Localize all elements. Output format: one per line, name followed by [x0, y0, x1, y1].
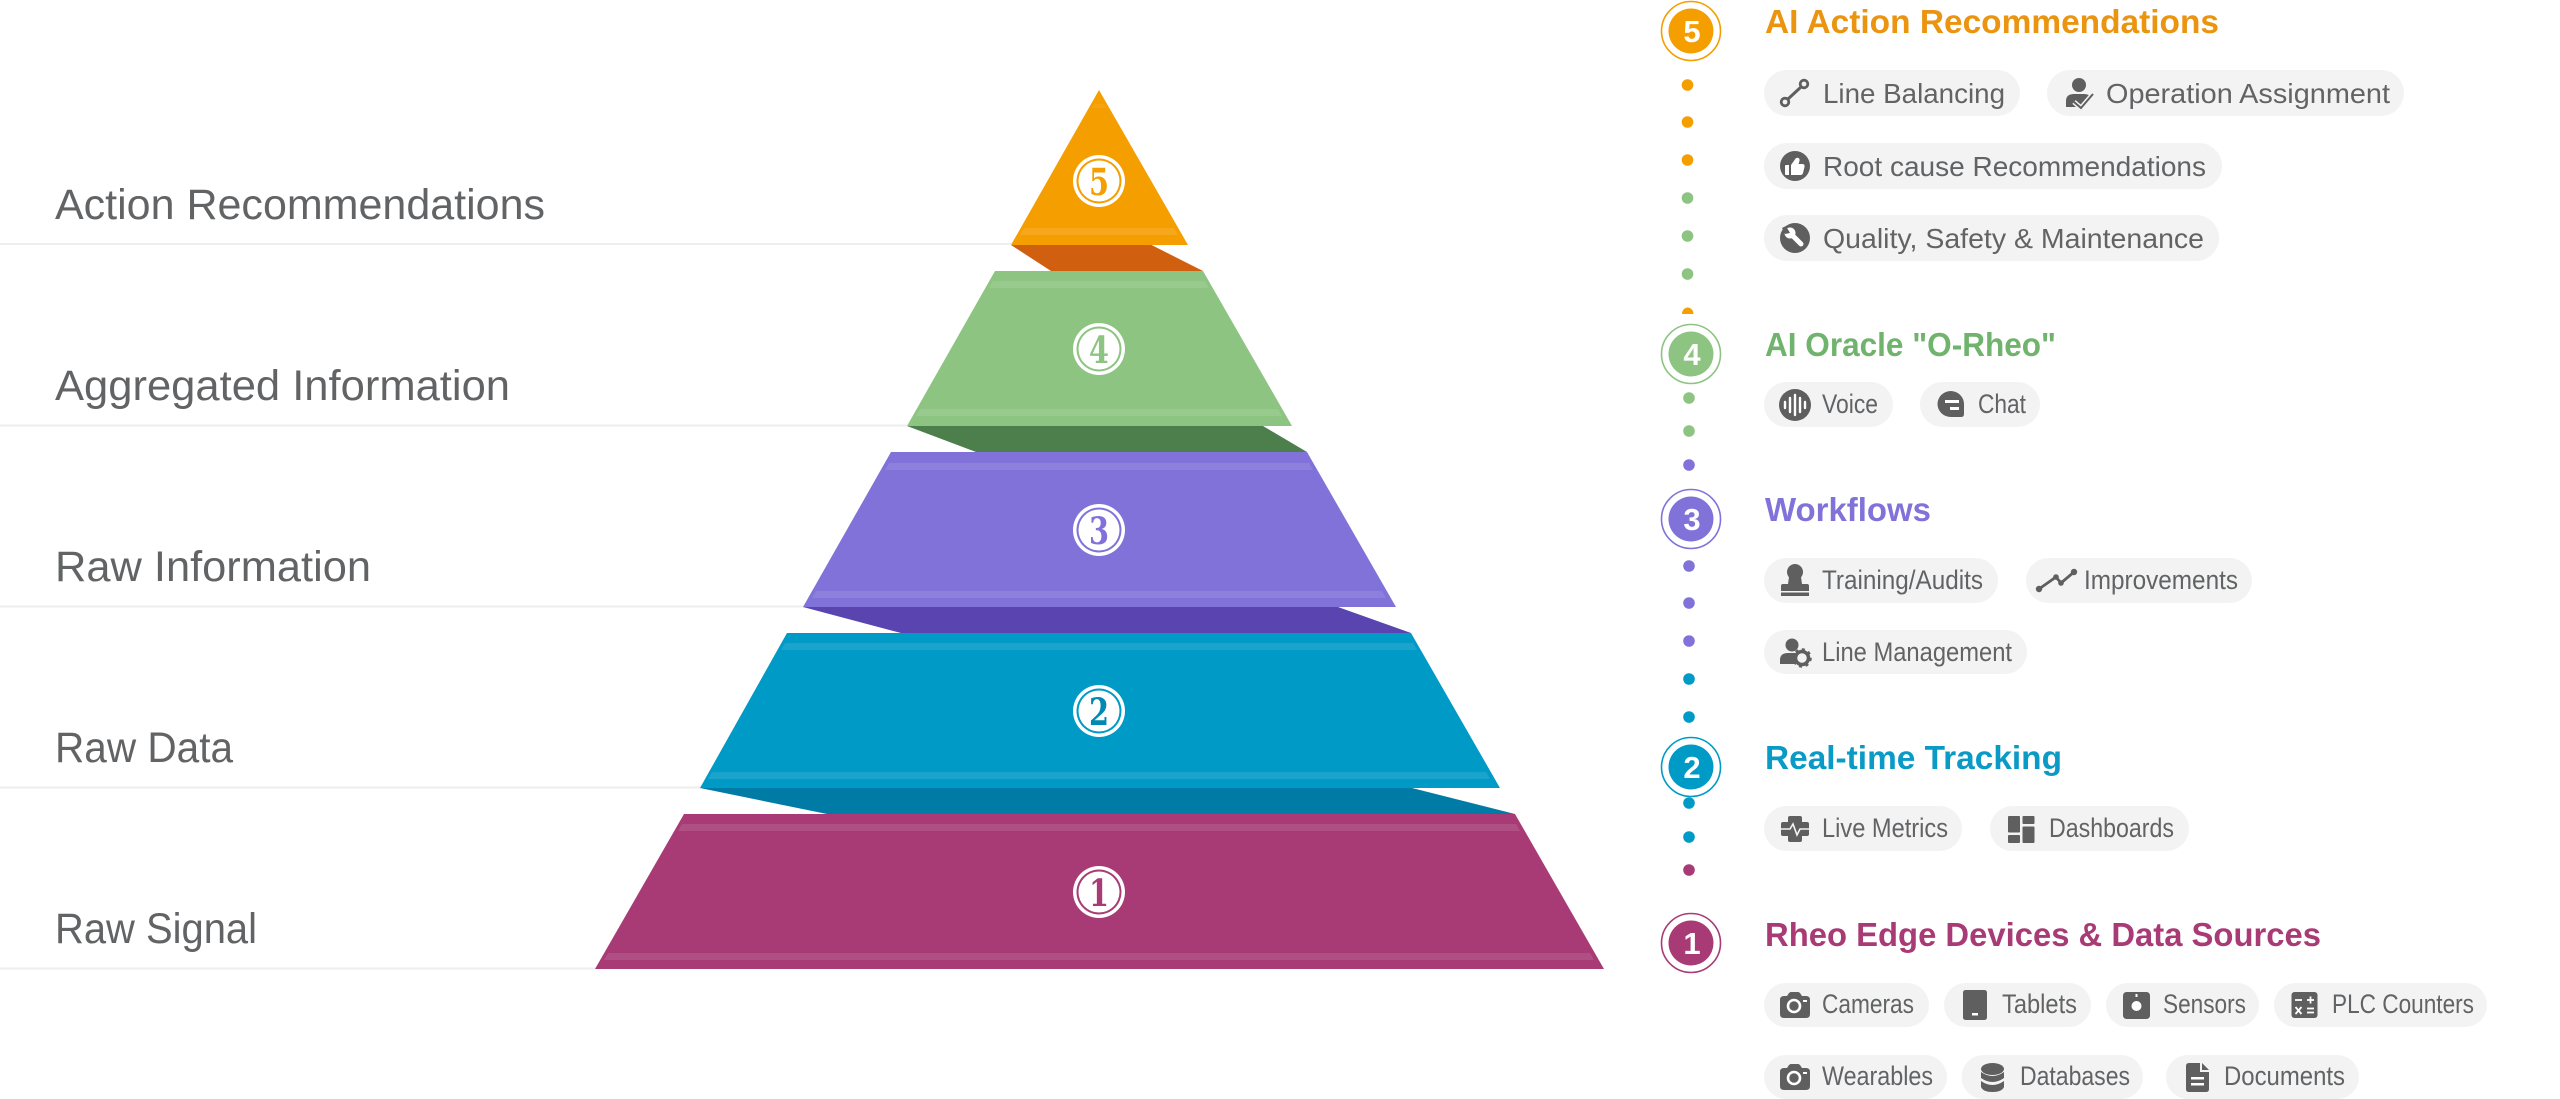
tier 3: purple — [803, 452, 1411, 633]
icon: voice wave — [1779, 389, 1811, 421]
text: Improvements — [2084, 565, 2238, 595]
icon: chat bubble — [1938, 391, 1964, 417]
chip: Dashboards — [1990, 806, 2189, 851]
tier 2: blue — [700, 633, 1515, 814]
tier 4: green: 4 — [1089, 328, 1109, 372]
text: Databases — [2020, 1061, 2130, 1091]
label: Raw Data: Raw Data — [55, 724, 233, 772]
chip: Root cause Recommendations — [1764, 143, 2222, 189]
chip: Live Metrics — [1764, 806, 1962, 851]
tier 1: maroon: 1 — [1089, 871, 1109, 915]
tier 4: green — [907, 271, 1307, 452]
tier 1: maroon — [595, 814, 1604, 969]
section 5: AI Action Recommendations — [1662, 2, 2404, 261]
icon: sensor — [2123, 992, 2150, 1019]
text: Line Management — [1822, 637, 2012, 667]
badge 3: 3 — [1683, 502, 1701, 537]
chip: Chat — [1920, 382, 2040, 427]
chip: Voice — [1764, 382, 1893, 427]
text: PLC Counters — [2332, 989, 2474, 1019]
text: Tablets — [2002, 989, 2077, 1019]
section 2: Real-time Tracking — [1662, 738, 2189, 851]
chip: Quality, Safety & Maintenance — [1764, 215, 2219, 261]
chip: Line Balancing — [1764, 70, 2020, 116]
chip: Wearables — [1764, 1055, 1947, 1099]
tier 2: blue: 2 — [1089, 690, 1109, 734]
text: Voice — [1822, 389, 1878, 419]
tier 3: purple: 3 — [1089, 509, 1109, 553]
icon: tablet — [1963, 990, 1987, 1020]
badge 5 — [1662, 2, 1720, 60]
badge 4 — [1662, 324, 1720, 384]
icon: medical pulse — [1781, 816, 1809, 842]
tier 5: orange apex: 5 — [1089, 160, 1109, 204]
timeline: connector dots — [1682, 79, 1695, 876]
heading: Workflows — [1765, 491, 1931, 528]
text: Cameras — [1822, 989, 1914, 1019]
text: Root cause Recommendations — [1823, 151, 2206, 182]
icon: stamp — [1781, 564, 1809, 596]
badge 5: 5 — [1683, 14, 1701, 49]
label: Action Recommendations: Action Recommendations — [55, 181, 545, 229]
icon: person with check — [2066, 78, 2093, 108]
badge 1 — [1662, 914, 1720, 972]
text: Documents — [2224, 1061, 2345, 1091]
text: Live Metrics — [1822, 813, 1948, 843]
label: Raw Signal: Raw Signal — [55, 905, 257, 953]
text: Training/Audits — [1822, 565, 1983, 595]
chart: pyramid — [595, 90, 1604, 969]
heading: Real-time Tracking — [1765, 739, 2062, 776]
badge 2 — [1662, 738, 1720, 796]
heading: AI Action Recommendations — [1765, 3, 2219, 40]
chip: Documents — [2166, 1055, 2359, 1099]
label: Aggregated Information: Aggregated Information — [55, 362, 510, 410]
heading: AI Oracle "O-Rheo" — [1765, 326, 2056, 363]
icon: calculator — [2292, 992, 2318, 1018]
heading: Rheo Edge Devices & Data Sources — [1765, 916, 2321, 953]
chip: Databases — [1962, 1055, 2143, 1099]
text: Quality, Safety & Maintenance — [1823, 223, 2204, 254]
text: Wearables — [1822, 1061, 1933, 1091]
icon: wrench — [1780, 223, 1810, 253]
icon: line node — [1781, 80, 1808, 106]
section 4: AI Oracle — [1662, 324, 2056, 427]
icon: dashboard tiles — [2008, 816, 2034, 843]
icon: database — [1981, 1063, 2004, 1092]
section 1: Rheo Edge Devices & Data Sources — [1662, 914, 2487, 1099]
chip: Line Management — [1764, 630, 2027, 674]
icon: person with gear — [1780, 638, 1810, 666]
chip: Operation Assignment — [2047, 70, 2404, 116]
chip: Tablets — [1944, 983, 2091, 1027]
badge 1: 1 — [1683, 926, 1701, 961]
text: Chat — [1978, 389, 2026, 419]
icon: camera — [1780, 992, 1810, 1018]
chip: PLC Counters — [2274, 983, 2487, 1027]
icon: document — [2186, 1063, 2209, 1092]
icon: line trend — [2036, 569, 2077, 592]
badge 3 — [1662, 490, 1720, 548]
text: Line Balancing — [1823, 78, 2005, 109]
chip: Sensors — [2106, 983, 2259, 1027]
text: Dashboards — [2049, 813, 2174, 843]
chip: Training/Audits — [1764, 558, 1998, 603]
text: Sensors — [2163, 989, 2246, 1019]
label: Raw Information: Raw Information — [55, 543, 371, 591]
badge 4: 4 — [1683, 337, 1701, 372]
badge 2: 2 — [1683, 750, 1701, 785]
text: Operation Assignment — [2106, 78, 2390, 109]
tier 5: orange apex — [1011, 90, 1203, 271]
chip: Improvements — [2026, 558, 2252, 603]
chip: Cameras — [1764, 983, 1929, 1027]
icon: thumbs up — [1780, 151, 1810, 181]
icon: wearable camera — [1780, 1064, 1810, 1090]
panel: left tier labels — [0, 181, 1012, 970]
section 3: Workflows — [1662, 490, 2252, 674]
